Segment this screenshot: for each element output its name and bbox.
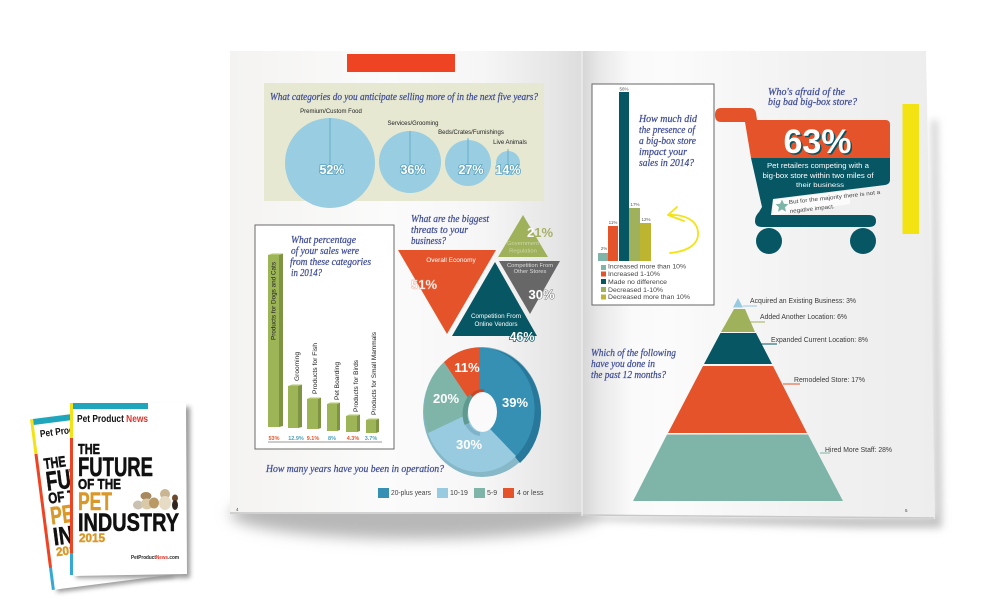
donut chart: years in operation: 11%: [454, 360, 480, 375]
cover title: [78, 441, 179, 545]
triangle: government regulation: 21%: [527, 225, 553, 240]
pyramid labels: [743, 298, 892, 454]
impact bars: [598, 86, 651, 261]
impact bars: 11%: [609, 220, 617, 225]
icon: star: [776, 200, 788, 212]
donut legend: [378, 488, 544, 498]
heading: impact question: How much did: [638, 113, 697, 125]
heading: threats question: threats to your: [411, 224, 469, 236]
bubble: premium custom food: 52%: [319, 163, 345, 177]
bubble: services grooming: 36%: [400, 163, 426, 177]
panel: big-box impact bar chart: [592, 84, 714, 305]
ribbon note: [789, 190, 882, 215]
panel: categories bubble chart: [264, 83, 544, 208]
bar percentages: 4.3%: [347, 436, 359, 442]
back report cover: Pet Product News: [39, 420, 112, 440]
pyramid chart: [633, 298, 892, 501]
front report cover: [70, 403, 190, 578]
cover title: INDUSTRY: [78, 509, 179, 537]
back report cover: FUTURE: [44, 457, 122, 497]
bubble: services grooming: Services/Grooming: [387, 121, 439, 127]
back report cover: THE: [43, 453, 67, 473]
ribbon note: negative impact.: [790, 204, 835, 215]
cart caption: Pet retailers competing with a: [767, 161, 870, 170]
cover masthead: Pet Product News: [77, 414, 148, 425]
green 3d bars: [268, 254, 379, 433]
triangle: other stores: Other Stores: [514, 269, 547, 275]
bubble: live animals: 14%: [495, 163, 521, 177]
impact legend: Decreased more than 10%: [608, 294, 690, 301]
impact bars: 2%: [601, 246, 607, 251]
cart caption: big-box store within two miles of: [762, 171, 874, 180]
icon: pets group: [133, 489, 178, 510]
heading: past 12 months question: Which of the following: [591, 347, 676, 359]
tier: hired: [633, 434, 843, 501]
pyramid labels: Acquired an Existing Business: 3%: [750, 298, 856, 305]
bar percentages: 9.1%: [307, 436, 319, 442]
donut legend: 20-plus years: [391, 490, 431, 497]
heading: big-box question: Who's afraid of the: [768, 86, 845, 98]
yellow accent bar: [902, 104, 919, 234]
rotated bar labels: Products for Birds: [353, 360, 360, 412]
back report cover: 2015: [55, 542, 83, 559]
cover colour stripes: [70, 403, 148, 575]
rotated bar labels: Products for Dogs and Cats: [270, 262, 278, 340]
icon: shopping cart infographic: [715, 108, 890, 254]
bubble: premium custom food: [285, 109, 375, 208]
impact bars: 56%: [619, 86, 629, 92]
slice: 5-9: [424, 362, 470, 433]
panel: sales percentage bar chart: [255, 225, 394, 449]
rotated bar labels: Pet Boarding: [334, 361, 341, 400]
heading: impact question: impact your: [639, 146, 688, 158]
slice: 10-19: [428, 414, 516, 472]
tier: remodeled: [668, 366, 807, 433]
arrow: yellow curve: [668, 207, 698, 253]
triangle: overall economy: Overall Economy: [426, 257, 476, 264]
wheels: [756, 228, 782, 254]
donut chart: years in operation: 39%: [502, 395, 528, 410]
back report cover: PET: [49, 498, 86, 530]
heading: big-box question: [768, 86, 857, 108]
heading: threats question: What are the biggest: [411, 213, 490, 225]
bar percentages: 53%: [268, 436, 280, 442]
triangle: government regulation: Regulation: [509, 248, 537, 254]
heading: sales question: from these categories: [290, 256, 371, 268]
heading: categories question: What categories do you anticipate selling more of in the next five years?: [270, 91, 538, 103]
back report cover: OF THE: [47, 485, 92, 508]
triangle: government regulation: [498, 215, 553, 257]
triangle: online vendors: 46%: [509, 330, 535, 344]
impact legend: Increased more than 10%: [608, 264, 686, 270]
bubble: live animals: [493, 140, 527, 177]
rotated bar labels: Grooming: [294, 351, 301, 381]
heading: past 12 months question: [591, 347, 676, 381]
donut chart: years in operation: 30%: [456, 437, 482, 452]
bubble: services grooming: [379, 121, 441, 193]
tier: expanded: [704, 333, 772, 364]
slice: 20-plus years: [479, 347, 535, 456]
red header block: [347, 54, 455, 72]
triangle: online vendors: [452, 262, 537, 344]
impact legend: Decreased 1-10%: [608, 287, 663, 294]
bubble: live animals: Live Animals: [493, 140, 527, 146]
cover title: FUTURE: [78, 452, 153, 482]
bar percentages: 3.7%: [365, 436, 377, 442]
cart handle and orange basket: [715, 108, 890, 158]
triangle: other stores: 30%: [528, 287, 555, 302]
heading: sales question: What percentage: [291, 234, 356, 246]
cover title: 2015: [79, 531, 105, 545]
cover title: THE: [78, 441, 100, 458]
heading: sales question: in 2014?: [291, 267, 322, 279]
pyramid labels: Expanded Current Location: 8%: [771, 337, 868, 344]
bubble: beds crates furnishings: 27%: [458, 163, 484, 177]
bubble: beds crates furnishings: Beds/Crates/Furnishings: [438, 130, 504, 136]
heading: threats question: business?: [411, 235, 446, 247]
bar percentages: [268, 436, 377, 442]
tier: acquired: [733, 298, 743, 308]
triangle: other stores: [499, 261, 560, 314]
back report cover: INDUSTRY: [51, 511, 155, 551]
bar percentages: 12.9%: [288, 436, 304, 442]
big percentage: 63%: [785, 124, 853, 162]
cover title: OF THE: [78, 476, 121, 493]
page number 4: 4: [236, 507, 239, 512]
pyramid labels: Remodeled Store: 17%: [794, 377, 865, 384]
cover website: PetProductNews.com: [131, 555, 179, 561]
heading: impact question: [638, 113, 697, 169]
impact legend: [601, 264, 690, 301]
donut chart: years in operation: [423, 347, 541, 477]
slice: 4 or less: [444, 348, 479, 401]
heading: threats question: [411, 213, 490, 247]
impact bars: 12%: [641, 217, 651, 222]
donut chart: years in operation: 20%: [433, 391, 459, 406]
impact bars: 17%: [630, 202, 640, 207]
cart caption: their business: [796, 182, 845, 189]
ribbon: [773, 190, 850, 215]
big percentage: 63%: [783, 123, 852, 161]
donut legend: 10-19: [450, 490, 468, 497]
right page: [582, 51, 935, 519]
magazine spread: [230, 51, 942, 539]
heading: impact question: a big-box store: [639, 135, 696, 147]
triangle: overall economy: [398, 250, 496, 334]
heading: years question: How many years have you been in operation?: [265, 463, 444, 475]
triangle: overall economy: 51%: [411, 277, 437, 292]
triangle: other stores: Competition From: [507, 263, 553, 269]
impact legend: Made no difference: [608, 279, 667, 286]
bar percentages: 8%: [328, 436, 336, 442]
donut legend: 4 or less: [517, 490, 544, 497]
pyramid labels: Hired More Staff: 28%: [825, 447, 892, 454]
rotated bar labels: [270, 262, 378, 415]
triangle: online vendors: Online Vendors: [474, 321, 518, 328]
triangle: online vendors: Competition From: [471, 313, 521, 320]
heading: big-box question: big bad big-box store?: [768, 96, 857, 108]
heading: sales question: [290, 234, 371, 279]
left page: [230, 51, 582, 514]
ribbon note: But for the majority there is not a: [789, 190, 882, 206]
heading: impact question: the presence of: [639, 124, 697, 136]
bubble: beds crates furnishings: [438, 130, 504, 186]
donut legend: 5-9: [487, 490, 497, 497]
heading: past 12 months question: have you done in: [591, 358, 655, 370]
cover title: PET: [78, 488, 112, 516]
triangle: government regulation: Government: [507, 241, 539, 247]
rotated bar labels: Products for Small Mammals: [371, 332, 378, 415]
rotated bar labels: Products for Fish: [312, 342, 319, 394]
heading: impact question: sales in 2014?: [639, 157, 694, 169]
page number 5: 5: [905, 508, 908, 513]
bubble: premium custom food: Premium/Custom Food: [300, 109, 362, 115]
heading: past 12 months question: the past 12 months?: [591, 369, 666, 381]
cart caption: [762, 161, 874, 189]
tier: added location: [721, 309, 755, 332]
back report cover: [30, 404, 174, 593]
impact legend: Increased 1-10%: [608, 271, 660, 278]
teal basket: [751, 158, 890, 227]
heading: sales question: of your sales were: [291, 245, 359, 257]
pyramid labels: Added Another Location: 6%: [760, 314, 847, 321]
